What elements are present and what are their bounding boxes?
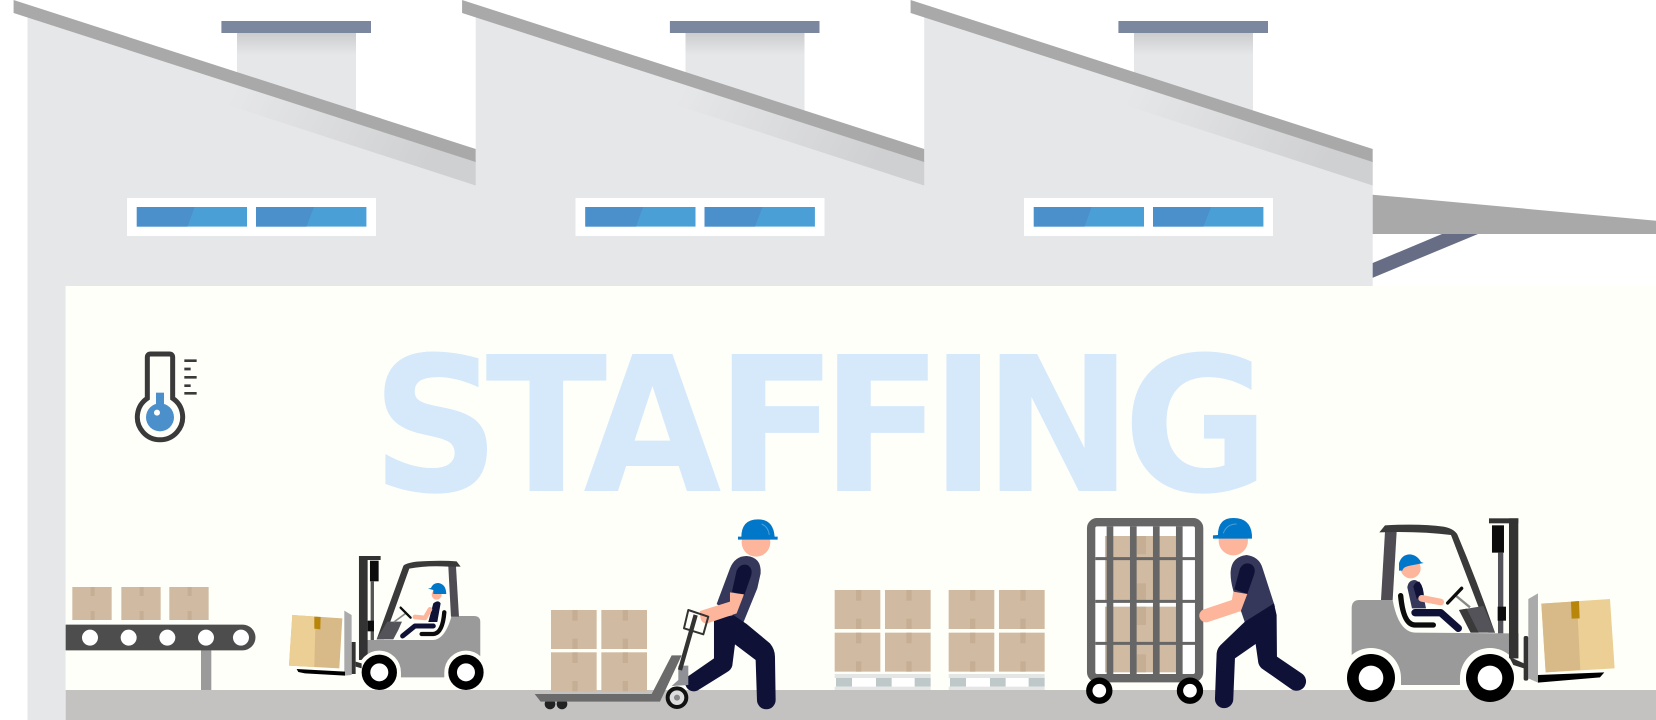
forklift body [1352, 600, 1509, 685]
floor [66, 690, 1656, 720]
driver [377, 583, 446, 639]
forklift wheels [352, 642, 488, 690]
bay 1: roof, chimney and window [14, 0, 476, 236]
forklift cab frame [1379, 525, 1495, 633]
canopy [1373, 195, 1656, 278]
forklift cab frame [377, 561, 461, 639]
title: STAFFING [371, 318, 1270, 536]
worker [1206, 518, 1306, 708]
warehouse interior [66, 286, 1656, 690]
icon: thermometer [137, 354, 197, 440]
forklift body [366, 616, 480, 677]
pallet truck with boxes and worker [535, 519, 778, 709]
worker [685, 519, 778, 709]
driver [1399, 554, 1495, 633]
large forklift with driver [1341, 518, 1615, 702]
cage trolley [1089, 522, 1200, 701]
small forklift with driver [289, 556, 488, 690]
bay 3: roof, chimney and window [911, 0, 1373, 236]
forklift mast [1489, 518, 1518, 658]
palletised cartons and cage trolley with worker [835, 518, 1306, 708]
building wall [28, 17, 1373, 720]
pallet stack 1 [835, 590, 931, 690]
forklift fork and carton [289, 611, 352, 676]
forklift wheels [1341, 633, 1524, 702]
pallet truck [535, 610, 708, 709]
stacked cartons [551, 610, 647, 691]
forklift mast [359, 556, 381, 660]
conveyor belt with boxes [66, 587, 255, 690]
pallet stack 2 [949, 590, 1045, 690]
bay 2: roof, chimney and window [462, 0, 924, 236]
forklift fork and carton [1524, 593, 1615, 683]
